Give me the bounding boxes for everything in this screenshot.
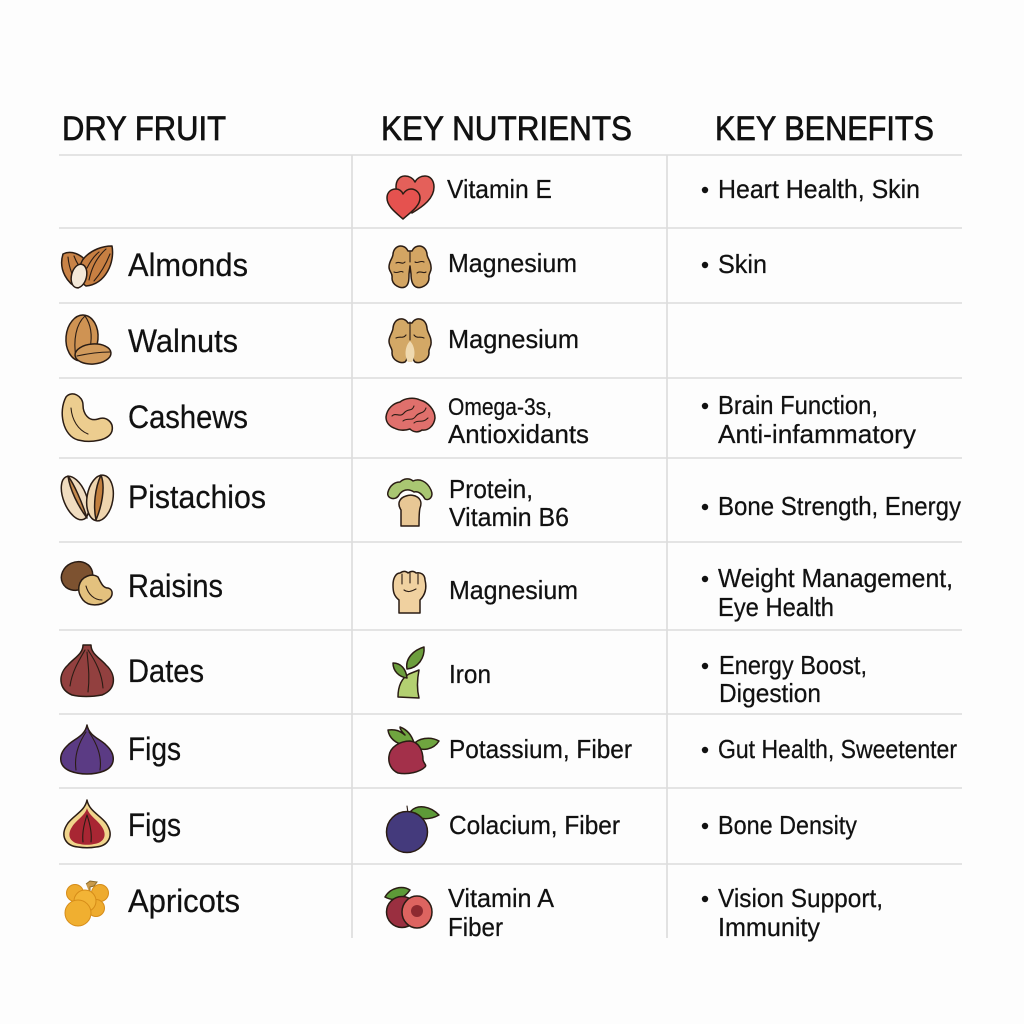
fruit name: Dates (128, 653, 204, 689)
heading: key benefits: KEY BENEFITS (715, 110, 934, 148)
nutrient icon: brain (386, 398, 435, 432)
fruit name: Figs (128, 807, 181, 843)
header row (62, 110, 934, 148)
icon: date (61, 645, 113, 696)
fruit name: Raisins (128, 568, 223, 604)
benefit text: Gut Health, Sweetenter (718, 734, 957, 764)
benefit text: Anti-infammatory (718, 419, 916, 449)
nutrient text: Fiber (448, 912, 503, 942)
benefit text: Bone Strength, Energy (718, 491, 961, 521)
benefit text (702, 563, 953, 622)
nutrient text: Magnesium (449, 575, 578, 605)
nutrient icon: cut fruit (385, 888, 432, 928)
benefit text: Vision Support, (718, 883, 883, 913)
fruit name: Figs (128, 731, 181, 767)
icon: apricots (65, 881, 108, 926)
nutrient text: Protein, (449, 474, 533, 504)
nutrient text: Vitamin B6 (449, 502, 569, 532)
nutrient text (448, 394, 589, 449)
nutrient text (449, 474, 569, 532)
benefit text: Skin (718, 249, 767, 279)
nutrient text: Antioxidants (448, 419, 589, 449)
icon: hearts (387, 176, 434, 219)
benefit text: Eye Health (718, 592, 834, 622)
benefit text (702, 883, 883, 942)
benefit text (702, 650, 867, 708)
icon: pistachios (56, 472, 116, 524)
nutrient text: Omega-3s, (448, 394, 552, 421)
icon: walnuts (64, 314, 112, 365)
fruit name: Apricots (128, 883, 240, 919)
icon: cut fig (64, 800, 110, 848)
nutrient icon: broccoli arm (388, 479, 432, 526)
fruit name: Pistachios (128, 479, 266, 515)
row 1: vitamin e (387, 174, 920, 219)
fruit name: Cashews (128, 399, 248, 435)
nutrient text: Iron (449, 659, 491, 689)
row 5: pistachios (56, 472, 961, 532)
icon: purple fig (61, 725, 113, 774)
row 4: cashews (62, 390, 916, 449)
nutrient text: Colacium, Fiber (449, 810, 620, 840)
row 8: figs purple (61, 725, 957, 774)
benefit text (702, 390, 916, 449)
row 10: apricots (65, 881, 883, 942)
nutrient icon: walnut half (389, 319, 431, 363)
benefit text: Energy Boost, (719, 650, 867, 680)
benefit text: Brain Function, (718, 390, 878, 420)
benefit text: Heart Health, Skin (718, 174, 920, 204)
nutrient text: Vitamin A (448, 883, 555, 913)
nutrient text: Magnesium (448, 324, 579, 354)
heading: key nutrients: KEY NUTRIENTS (381, 110, 632, 148)
row 9: figs cut (64, 800, 857, 852)
row 7: dates (61, 645, 867, 708)
icon: cashew (62, 394, 112, 441)
benefit text: Digestion (719, 678, 821, 708)
nutrient icon: plum (386, 806, 439, 852)
nutrient text: Vitamin E (447, 174, 552, 204)
row 6: raisins (57, 557, 953, 622)
icon: raisins (57, 557, 112, 605)
fruit name: Almonds (128, 247, 248, 283)
benefit text: Bone Density (718, 810, 857, 840)
nutrient icon: walnut (389, 246, 431, 288)
row 3: walnuts (64, 314, 579, 365)
row 2: almonds (62, 246, 767, 289)
heading: dry fruit: DRY FRUIT (62, 110, 226, 148)
nutrient text (448, 883, 555, 942)
benefit text: Immunity (718, 912, 820, 942)
nutrient icon: fist (393, 572, 426, 613)
nutrient text: Potassium, Fiber (449, 734, 632, 764)
icon: almonds (62, 246, 113, 289)
fruit name: Walnuts (128, 323, 238, 359)
nutrient icon: beet (388, 727, 439, 774)
nutrient text: Magnesium (448, 248, 577, 278)
benefit text: Weight Management, (718, 563, 953, 593)
nutrient icon: leaf sprout (393, 647, 424, 698)
